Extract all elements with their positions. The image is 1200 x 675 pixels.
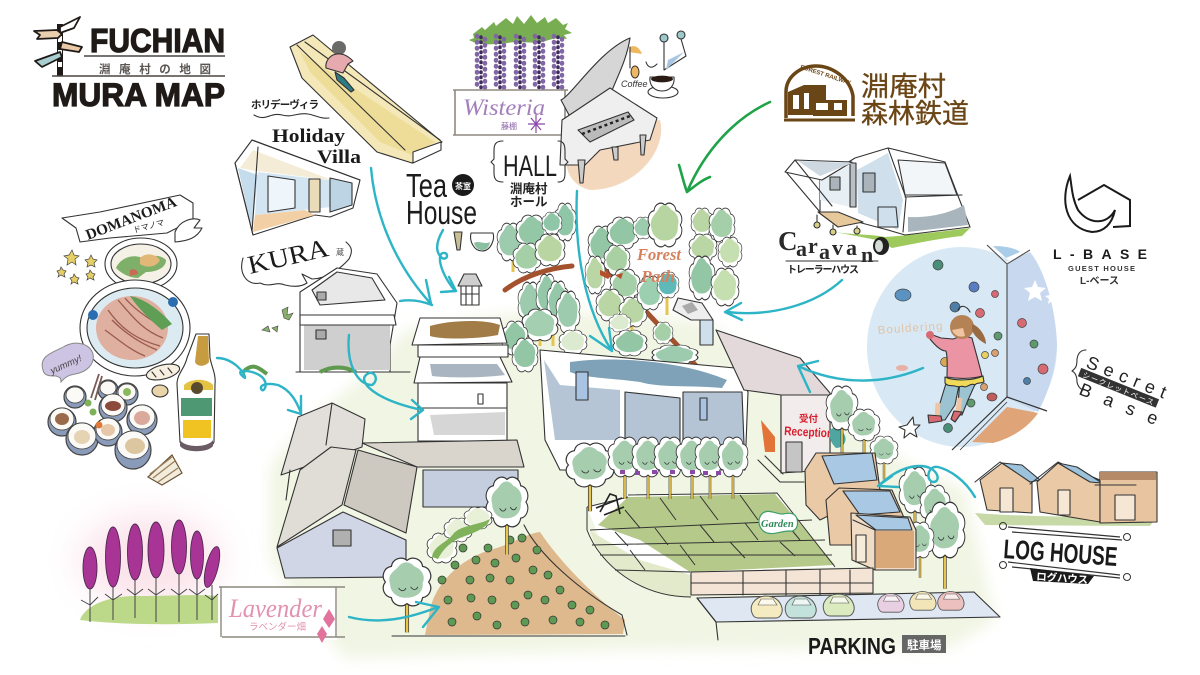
label: KURA bubble: KURA: [245, 233, 331, 280]
label: Holiday Villa: Holiday: [272, 126, 346, 147]
climbing holds: [895, 260, 1048, 432]
label: Holiday Villa: ホリデーヴィラ: [251, 98, 319, 111]
sign: Wisteria: Wisteria: [463, 95, 545, 120]
label: Hall: 淵庵村: [510, 181, 548, 196]
sign: Log House: LOG HOUSE: [1003, 534, 1118, 572]
label: caravan: a: [819, 239, 830, 264]
illustration: champagne bottle: [177, 334, 215, 451]
illustration: main building: [540, 350, 748, 470]
climbing girl: [926, 306, 986, 423]
logo subtitle: 淵庵村の地図: [99, 62, 211, 76]
forest path, upper part: [505, 266, 572, 290]
label: reception: Reception: [784, 424, 834, 441]
logo: Fuchian Mura Map: [34, 17, 225, 113]
illustration: parking lot: [697, 592, 1000, 640]
forest path, lower part: [600, 262, 698, 368]
label: Holiday Villa: Villa: [317, 147, 362, 168]
label: Forest Path: [636, 245, 682, 286]
logo: L-BASE: [1053, 176, 1147, 287]
label: forest railway: 森林鉄道: [861, 99, 969, 129]
illustration: retaining wall: [691, 568, 873, 595]
illustration: Holiday Villa house: [235, 140, 360, 235]
label: Parking: 駐車場: [907, 638, 942, 652]
arrow: Domanoma: [217, 358, 301, 414]
label: caravan: v: [832, 235, 843, 260]
arrow: Holiday Villa to centre: [371, 168, 432, 305]
illustration: caravan: [785, 148, 970, 248]
label: forest railway: 淵庵村: [861, 72, 946, 102]
illustration: log houses: [975, 462, 1157, 526]
label: Parking: PARKING: [808, 633, 896, 659]
bubble: yummy: yummy!: [48, 353, 84, 377]
label: Tea House: House: [406, 194, 477, 231]
logo: forest railway: FOREST RAILWAY: [799, 65, 851, 87]
arrow: caravan: [725, 280, 842, 320]
bubble: yummy: [42, 343, 93, 382]
icon: sparkle: [899, 417, 920, 438]
label: Secret Base: [1072, 350, 1175, 434]
ground wash: [270, 310, 995, 658]
label: caravan: a: [796, 236, 807, 261]
logo: L-BASE: L-ベース: [1080, 275, 1119, 287]
logo: L-BASE: L-BASE: [1053, 246, 1147, 262]
sign: Wisteria: [453, 90, 568, 135]
sign: Log House: [1000, 522, 1130, 587]
arrow: Lavender: [349, 602, 439, 627]
illustration: pasta plate: [80, 280, 190, 376]
label: caravan: n: [861, 242, 873, 267]
illustration: lavender: [80, 515, 223, 624]
sign: Wisteria: 藤棚: [501, 121, 517, 131]
label: Garden: Garden: [761, 519, 794, 530]
label: caravan: r: [808, 233, 818, 258]
banner: Domanoma: [62, 194, 202, 244]
child on slide: [326, 41, 354, 92]
sign: Lavender: [219, 587, 345, 643]
arrow: Log House: [878, 466, 975, 497]
label: caravan: C: [778, 226, 798, 256]
label: Hall: ホール: [510, 195, 548, 209]
illustration: building front trees: [566, 437, 748, 511]
illustration: small tea house: [458, 274, 482, 305]
sign: Lavender: Lavender: [228, 594, 323, 623]
label: forest railway: [861, 72, 969, 129]
illustration: small dishes: [48, 374, 157, 469]
illustration: grand piano: [560, 38, 661, 190]
arrow: forest railway: [679, 102, 770, 192]
label: Forest Path: Forest: [636, 245, 682, 264]
icon: stars: [57, 250, 97, 284]
banner: Domanoma: DOMANOMA: [84, 194, 179, 244]
icon: cars: [751, 592, 964, 618]
illustration: wisteria: [469, 15, 572, 92]
label: Tea House: 茶室: [455, 181, 471, 191]
logo: forest railway: [784, 65, 855, 120]
label: Hall: HALL: [503, 150, 557, 183]
illustration: reception trees: [826, 386, 965, 589]
arrow: Kura: [349, 335, 423, 419]
label: caravan: a: [846, 235, 857, 260]
sign: Lavender: ラベンダー畑: [249, 621, 306, 633]
arrow: Tea House: [437, 230, 456, 292]
label: Tea House: [406, 167, 477, 231]
illustration: small back building: [673, 298, 713, 345]
illustration: cabins: [805, 453, 916, 570]
illustration: Kura storehouse: [243, 268, 410, 374]
illustration: field trees and hedge: [383, 477, 528, 632]
label: Holiday Villa: [251, 98, 362, 168]
logo: L-BASE: GUEST HOUSE: [1068, 264, 1135, 273]
label: reception: [784, 413, 834, 441]
label: Secret Base: シークレットベース: [1081, 370, 1155, 407]
illustration: bread: [145, 361, 181, 397]
illustration: climbing wall: [867, 245, 1059, 450]
label: caravan: [778, 226, 878, 276]
label: Forest Path: Path: [640, 267, 675, 286]
illustration: forest trees: [497, 203, 742, 372]
icon: signpost: [34, 17, 82, 76]
forest path marker: [600, 270, 623, 279]
label: Garden: [759, 511, 798, 534]
icon: tea whisk and bowl: [454, 232, 494, 251]
label: reception: 受付: [799, 413, 818, 425]
label: KURA bubble: [242, 233, 351, 286]
label: Secret Base: Base: [1077, 379, 1174, 434]
sign: Log House: ログハウス: [1036, 570, 1089, 587]
illustration: planted field: [392, 525, 627, 636]
illustration: salad plate: [105, 238, 177, 290]
illustration: sandwich: [148, 455, 182, 485]
banner: Domanoma: ドマノマ: [132, 218, 165, 235]
illustration: large left house: [277, 403, 524, 578]
icon: music notes and coffee: [621, 31, 686, 98]
logo line 2: MURA MAP: [52, 77, 225, 113]
illustration: reception building: [716, 330, 834, 482]
label: Secret Base: Secret: [1084, 352, 1175, 405]
logo line 1: FUCHIAN: [90, 22, 225, 59]
arrow: Hall to building: [577, 191, 612, 351]
illustration: slide: [290, 35, 442, 163]
icon: caravan wheel: [873, 237, 889, 255]
arrow: Secret Base: [798, 361, 923, 392]
illustration: centre stack building: [412, 318, 512, 441]
icon: music notes and coffee: Coffee: [621, 79, 648, 89]
label: Tea House: Tea: [406, 167, 447, 204]
label: KURA bubble: 蔵: [336, 247, 344, 257]
label: caravan: トレーラーハウス: [787, 264, 859, 276]
illustration: garden tile lawn: [587, 493, 835, 597]
label: Bouldering: Bouldering: [877, 320, 944, 337]
illustration: bench: [596, 494, 624, 515]
label: Hall: [491, 141, 568, 209]
